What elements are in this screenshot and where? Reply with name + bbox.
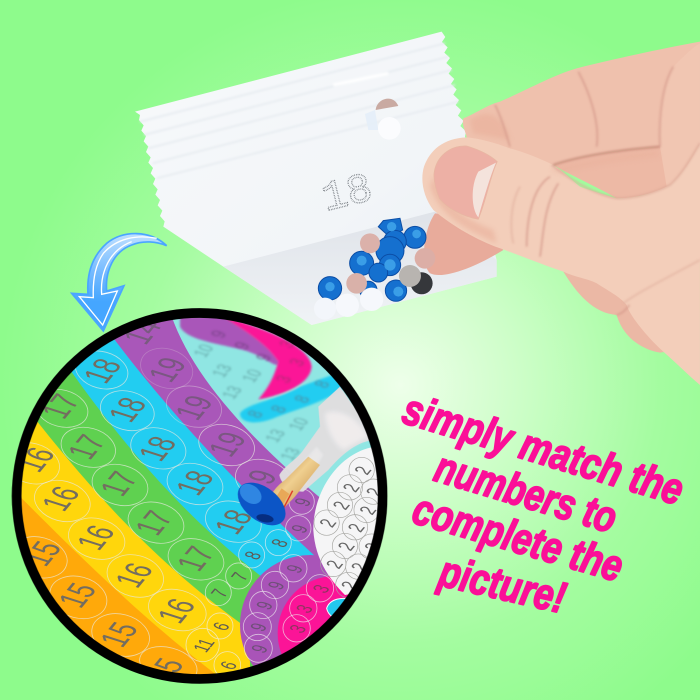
small band numbers: 2 [361,486,388,499]
large band numbers: 18 [100,393,155,426]
large band numbers: 19 [200,428,255,461]
thumb and palm [422,137,700,385]
small band numbers: 2 [336,579,363,592]
blurred background numbers: 8 [290,393,315,405]
large band numbers: 16 [107,559,162,592]
small band numbers [194,466,378,669]
small band numbers: 2 [314,517,342,530]
small band numbers: 9 [281,562,308,575]
large band numbers: 17 [169,542,224,575]
blue gem on pen tip [238,482,286,526]
small band numbers: 2 [338,481,365,494]
blurred background numbers: 9 [252,352,276,363]
caption: simply match the numbers to complete the picture!: picture! [434,547,570,623]
curved blue arrow [72,234,167,331]
small band numbers: 9 [289,496,317,509]
blurred background numbers: 9 [230,340,255,352]
large band numbers: 16 [69,521,124,554]
blurred background numbers: 8 [243,408,268,420]
small band numbers: 2 [346,561,373,574]
small band numbers: 6 [208,620,235,633]
photo: sealed bag of gems [135,32,497,325]
top swirl shapes [180,317,347,422]
blurred background numbers: 13 [218,384,247,401]
small band numbers: 3 [308,582,335,595]
blurred background numbers: 8 [267,403,291,415]
large band numbers: 17 [127,507,182,539]
large band numbers: 19 [140,353,195,386]
large band numbers: 5 [146,654,193,677]
large band numbers: 15 [50,579,105,612]
bag seal ribs [140,43,458,178]
large band numbers: 15 [15,537,70,570]
blurred background numbers: 13 [261,427,290,445]
small band numbers: 3 [291,602,318,615]
small band numbers: 9 [245,620,272,634]
large band numbers: 15 [92,618,147,651]
large band numbers: 18 [130,432,185,465]
large band numbers: 14 [115,316,170,348]
small band numbers: 2 [349,464,377,477]
small band numbers: 9 [251,599,278,612]
large band numbers: 17 [92,467,147,500]
middle finger [553,147,673,198]
blurred background numbers: 13 [276,446,305,463]
large band numbers: 9 [239,466,286,488]
small band numbers: 6 [215,659,242,672]
back finger through clear bag [424,213,503,275]
caption: simply match the numbers to complete the picture!: numbers to [429,443,622,543]
thumbnail [434,146,497,219]
small band numbers: 2 [333,540,360,553]
photo: hand holding bag [422,42,700,385]
small band numbers: 2 [343,521,370,534]
diamond painting pen tool [273,386,370,508]
canvas colour bands [21,318,378,674]
blurred background numbers: 10 [189,342,219,360]
large band numbers [24,324,275,672]
large band numbers: 18 [75,355,130,387]
small band numbers: 8 [266,537,293,550]
small band numbers: 8 [239,549,267,562]
small band numbers: 2 [321,558,348,571]
forefinger [463,42,700,165]
large band numbers: 18 [168,467,223,499]
caption: simply match the numbers to complete the picture! [397,385,689,623]
blurred background numbers: 10 [284,416,314,433]
large band numbers: 16 [9,443,64,476]
circular zoom-in detail of numbered canvas [0,300,392,695]
hand backing [643,130,700,263]
large band numbers: 16 [149,595,204,627]
small band numbers: 9 [246,642,273,655]
printed number 18 on bag: 18 [317,165,377,224]
circle black border [17,313,383,679]
small band numbers: 9 [263,579,290,592]
blurred background numbers [189,328,335,463]
blurred background numbers: 10 [238,367,267,385]
lower fingers [563,272,677,353]
bag body [135,32,497,325]
clear window of bag [223,212,497,325]
gem seen through the top of the bag [365,99,401,140]
small band numbers: 7 [206,587,233,600]
large band numbers: 17 [60,431,115,463]
small band numbers: 7 [226,570,254,583]
soft hand shading [430,114,660,243]
large band numbers: 18 [206,506,261,538]
blurred background numbers: 3 [285,357,310,368]
knuckle creases [495,67,700,315]
number circles [0,342,296,689]
large band numbers: 17 [34,390,89,423]
small band numbers: 2 [359,541,387,554]
blurred background numbers: 8 [310,378,335,390]
gems in bag [314,218,435,320]
small band numbers: 11 [188,636,220,655]
large band numbers: 19 [167,391,222,424]
blurred background numbers: 9 [207,328,231,340]
palm web [659,43,700,187]
small band numbers: 2 [328,499,355,512]
small band numbers: 2 [354,504,382,517]
large band numbers: 16 [34,482,89,515]
blurred background numbers: 13 [208,362,237,380]
caption: simply match the numbers to complete the picture!: complete the [407,485,628,592]
blurred background numbers: 3 [272,373,296,385]
blurred background numbers: 3 [275,338,300,350]
small band numbers: 3 [284,622,312,635]
small band numbers: 9 [286,522,313,535]
